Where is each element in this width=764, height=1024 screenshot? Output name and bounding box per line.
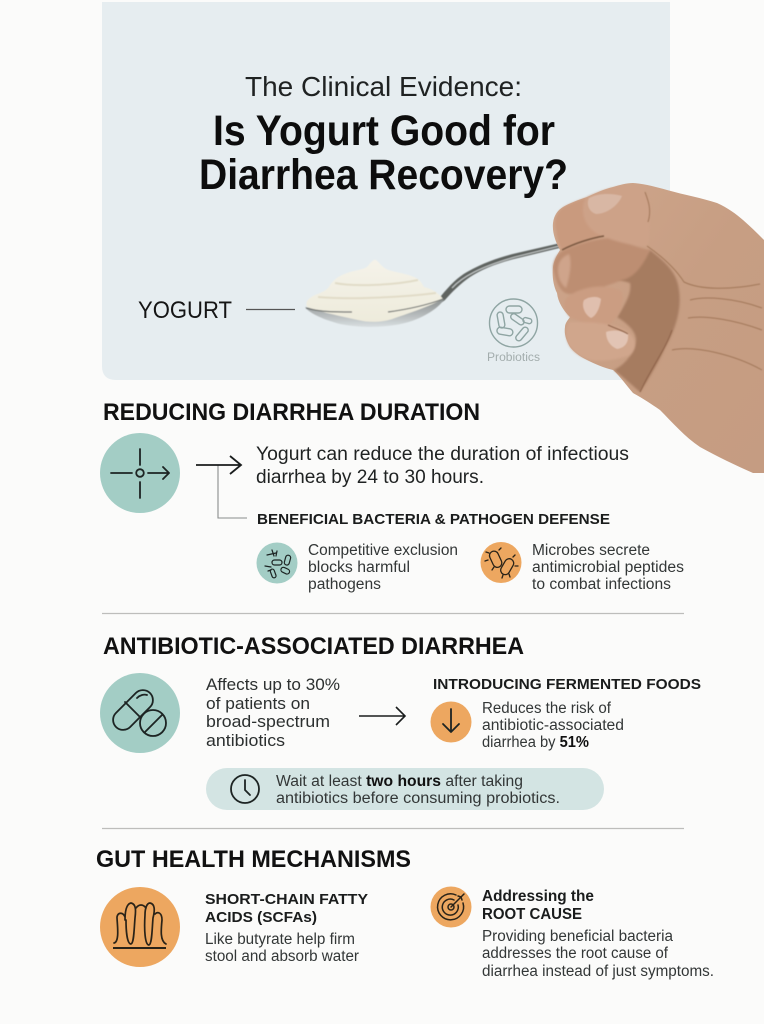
title: The Clinical Evidence: [245, 71, 522, 102]
text: root cause: ROOT CAUSE [482, 906, 582, 923]
panel: hero [102, 2, 670, 380]
text: competitive exclusion [308, 542, 458, 593]
arrow [359, 707, 405, 725]
text: microbes: to combat infections [532, 576, 671, 593]
callout: timing: antibiotics before consuming probiotics. [276, 790, 560, 807]
text: microbes: Microbes secrete [532, 542, 650, 559]
text: root cause: addresses the root cause of [482, 945, 669, 962]
hand creases [562, 192, 762, 392]
icon: pills [100, 673, 180, 753]
text: reduces risk: diarrhea by 51% [482, 734, 589, 751]
icon: microbes [480, 542, 522, 583]
text: affects patients: of patients on [206, 695, 310, 713]
text: competitive exclusion: blocks harmful [308, 559, 410, 576]
text: reduces risk [482, 700, 624, 751]
text: reduces risk: Reduces the risk of [482, 700, 612, 717]
text: competitive exclusion: Competitive exclusion [308, 542, 458, 559]
probiotics badge [487, 299, 540, 364]
subheading: beneficial bacteria: BENEFICIAL BACTERIA & PATHOGEN DEFENSE [257, 511, 610, 528]
yogurt label: YOGURT [138, 297, 232, 324]
text: duration reduction [256, 444, 629, 488]
spoon with yogurt [305, 233, 605, 327]
heading: antibiotic-associated diarrhea: ANTIBIOTIC-ASSOCIATED DIARRHEA [103, 633, 524, 660]
text: duration reduction: Yogurt can reduce the duration of infectious [256, 444, 629, 465]
palm shadow [607, 250, 680, 392]
title: Is Yogurt Good for [213, 107, 555, 155]
hand [553, 183, 764, 473]
text: affects patients: broad-spectrum [206, 713, 330, 731]
text: short-chain fatty acids: stool and absorb water [205, 948, 359, 965]
icon: target arrows on teal circle [100, 433, 180, 513]
fingers [553, 186, 650, 361]
hand silhouette [553, 183, 764, 473]
text: affects patients: antibiotics [206, 732, 285, 750]
text: competitive exclusion: pathogens [308, 576, 381, 593]
icon: intestinal villi [100, 887, 180, 967]
arrow with connector [196, 456, 247, 518]
fingernails [583, 194, 628, 349]
title [199, 71, 568, 199]
subheading: fermented foods: INTRODUCING FERMENTED FOODS [433, 676, 701, 693]
heading: reducing diarrhea duration: REDUCING DIARRHEA DURATION [103, 399, 480, 426]
text: short-chain fatty acids: SHORT-CHAIN FATTY [205, 891, 368, 908]
text: affects patients [206, 676, 340, 750]
text: reduces risk: antibiotic-associated [482, 717, 624, 734]
icon: competitive exclusion [256, 542, 298, 584]
text: short-chain fatty acids: Like butyrate help firm [205, 931, 355, 948]
text: affects patients: Affects up to 30% [206, 676, 340, 694]
text: root cause: Addressing the [482, 888, 594, 905]
text: short-chain fatty acids: ACIDS (SCFAs) [205, 909, 317, 926]
icon: target [430, 886, 472, 928]
text: root cause: diarrhea instead of just symptoms. [482, 963, 714, 980]
text: duration reduction: diarrhea by 24 to 30 hours. [256, 467, 484, 488]
text: microbes: antimicrobial peptides [532, 559, 684, 576]
text: short-chain fatty acids [205, 891, 368, 965]
callout: timing: Wait at least two hours after taking [276, 773, 523, 790]
icon: down arrow [430, 702, 472, 742]
spoon handle end [677, 201, 694, 212]
text: microbes [532, 542, 684, 593]
callout: timing [206, 768, 604, 810]
heading: gut health mechanisms: GUT HEALTH MECHANISMS [96, 846, 411, 873]
probiotics badge: Probiotics [487, 352, 540, 364]
icon: clock [231, 775, 259, 803]
title: Diarrhea Recovery? [199, 151, 568, 199]
text: root cause [482, 888, 714, 980]
text: root cause: Providing beneficial bacteria [482, 928, 673, 945]
